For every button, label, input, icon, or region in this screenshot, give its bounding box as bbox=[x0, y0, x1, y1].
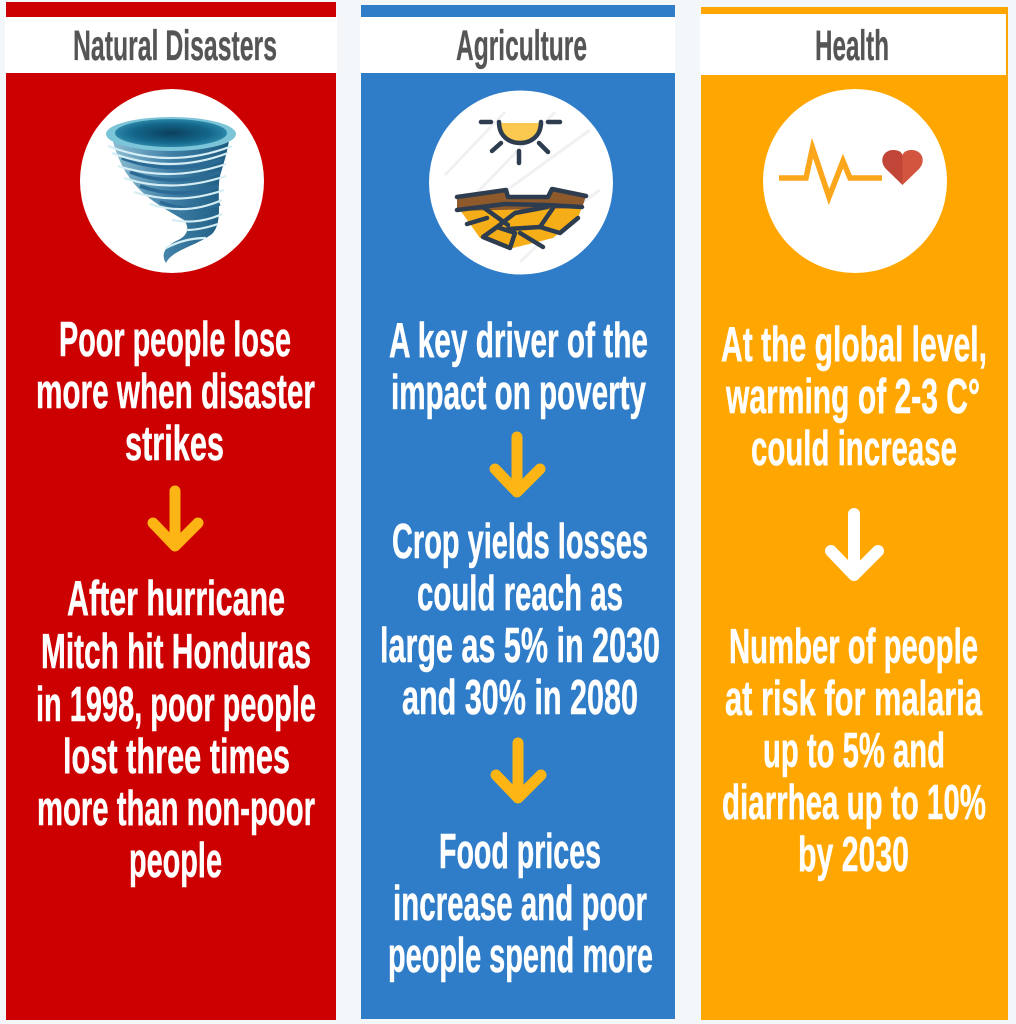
text: key driver bbox=[389, 314, 648, 420]
panel: health bbox=[700, 7, 1008, 1020]
text: crop yields: and 30% in 2080 bbox=[402, 671, 638, 725]
header: natural disasters: Natural Disasters bbox=[73, 22, 277, 70]
text: poor people lose more: strikes bbox=[125, 417, 224, 471]
text: poor people lose more: more when disaster bbox=[36, 365, 315, 419]
text: global warming bbox=[721, 318, 987, 476]
text: hurricane mitch: more than non-poor bbox=[37, 782, 315, 836]
header: health: Health bbox=[815, 22, 889, 70]
arrow: down yellow bbox=[495, 437, 540, 492]
icon: tornado bbox=[80, 89, 264, 273]
text: hurricane mitch: After hurricane bbox=[67, 572, 285, 626]
text: crop yields: could reach as bbox=[417, 567, 623, 621]
text: key driver: A key driver of the bbox=[389, 314, 648, 368]
text: key driver: impact on poverty bbox=[391, 366, 646, 420]
header: health bbox=[700, 14, 1006, 75]
arrow: down white bbox=[831, 514, 878, 575]
header: agriculture: Agriculture bbox=[456, 22, 587, 70]
arrow: down yellow bbox=[496, 743, 541, 798]
panel: natural disasters bbox=[5, 2, 337, 1020]
text: food prices bbox=[388, 825, 653, 983]
text: crop yields: large as 5% in 2030 bbox=[380, 619, 660, 673]
text: hurricane mitch: in 1998, poor people bbox=[36, 678, 316, 732]
text: food prices: increase and poor bbox=[393, 877, 647, 931]
text: food prices: Food prices bbox=[439, 825, 601, 879]
text: malaria and diarrhea: by 2030 bbox=[798, 828, 909, 882]
text: hurricane mitch bbox=[36, 572, 316, 888]
header: agriculture bbox=[360, 17, 675, 73]
text: malaria and diarrhea bbox=[722, 620, 986, 882]
icon: sun and cracked earth bbox=[429, 90, 613, 274]
icon: heartbeat and heart bbox=[763, 89, 947, 273]
text: poor people lose more: Poor people lose bbox=[59, 313, 291, 367]
text: poor people lose more bbox=[36, 313, 315, 471]
text: food prices: people spend more bbox=[388, 929, 653, 983]
text: hurricane mitch: Mitch hit Honduras bbox=[41, 625, 311, 679]
panel: agriculture bbox=[360, 5, 675, 1019]
arrow: down yellow bbox=[153, 491, 198, 546]
text: hurricane mitch: people bbox=[129, 834, 222, 888]
text: hurricane mitch: lost three times bbox=[63, 730, 290, 784]
text: crop yields bbox=[380, 515, 660, 725]
header: natural disasters bbox=[5, 17, 337, 73]
text: crop yields: Crop yields losses bbox=[392, 515, 648, 569]
